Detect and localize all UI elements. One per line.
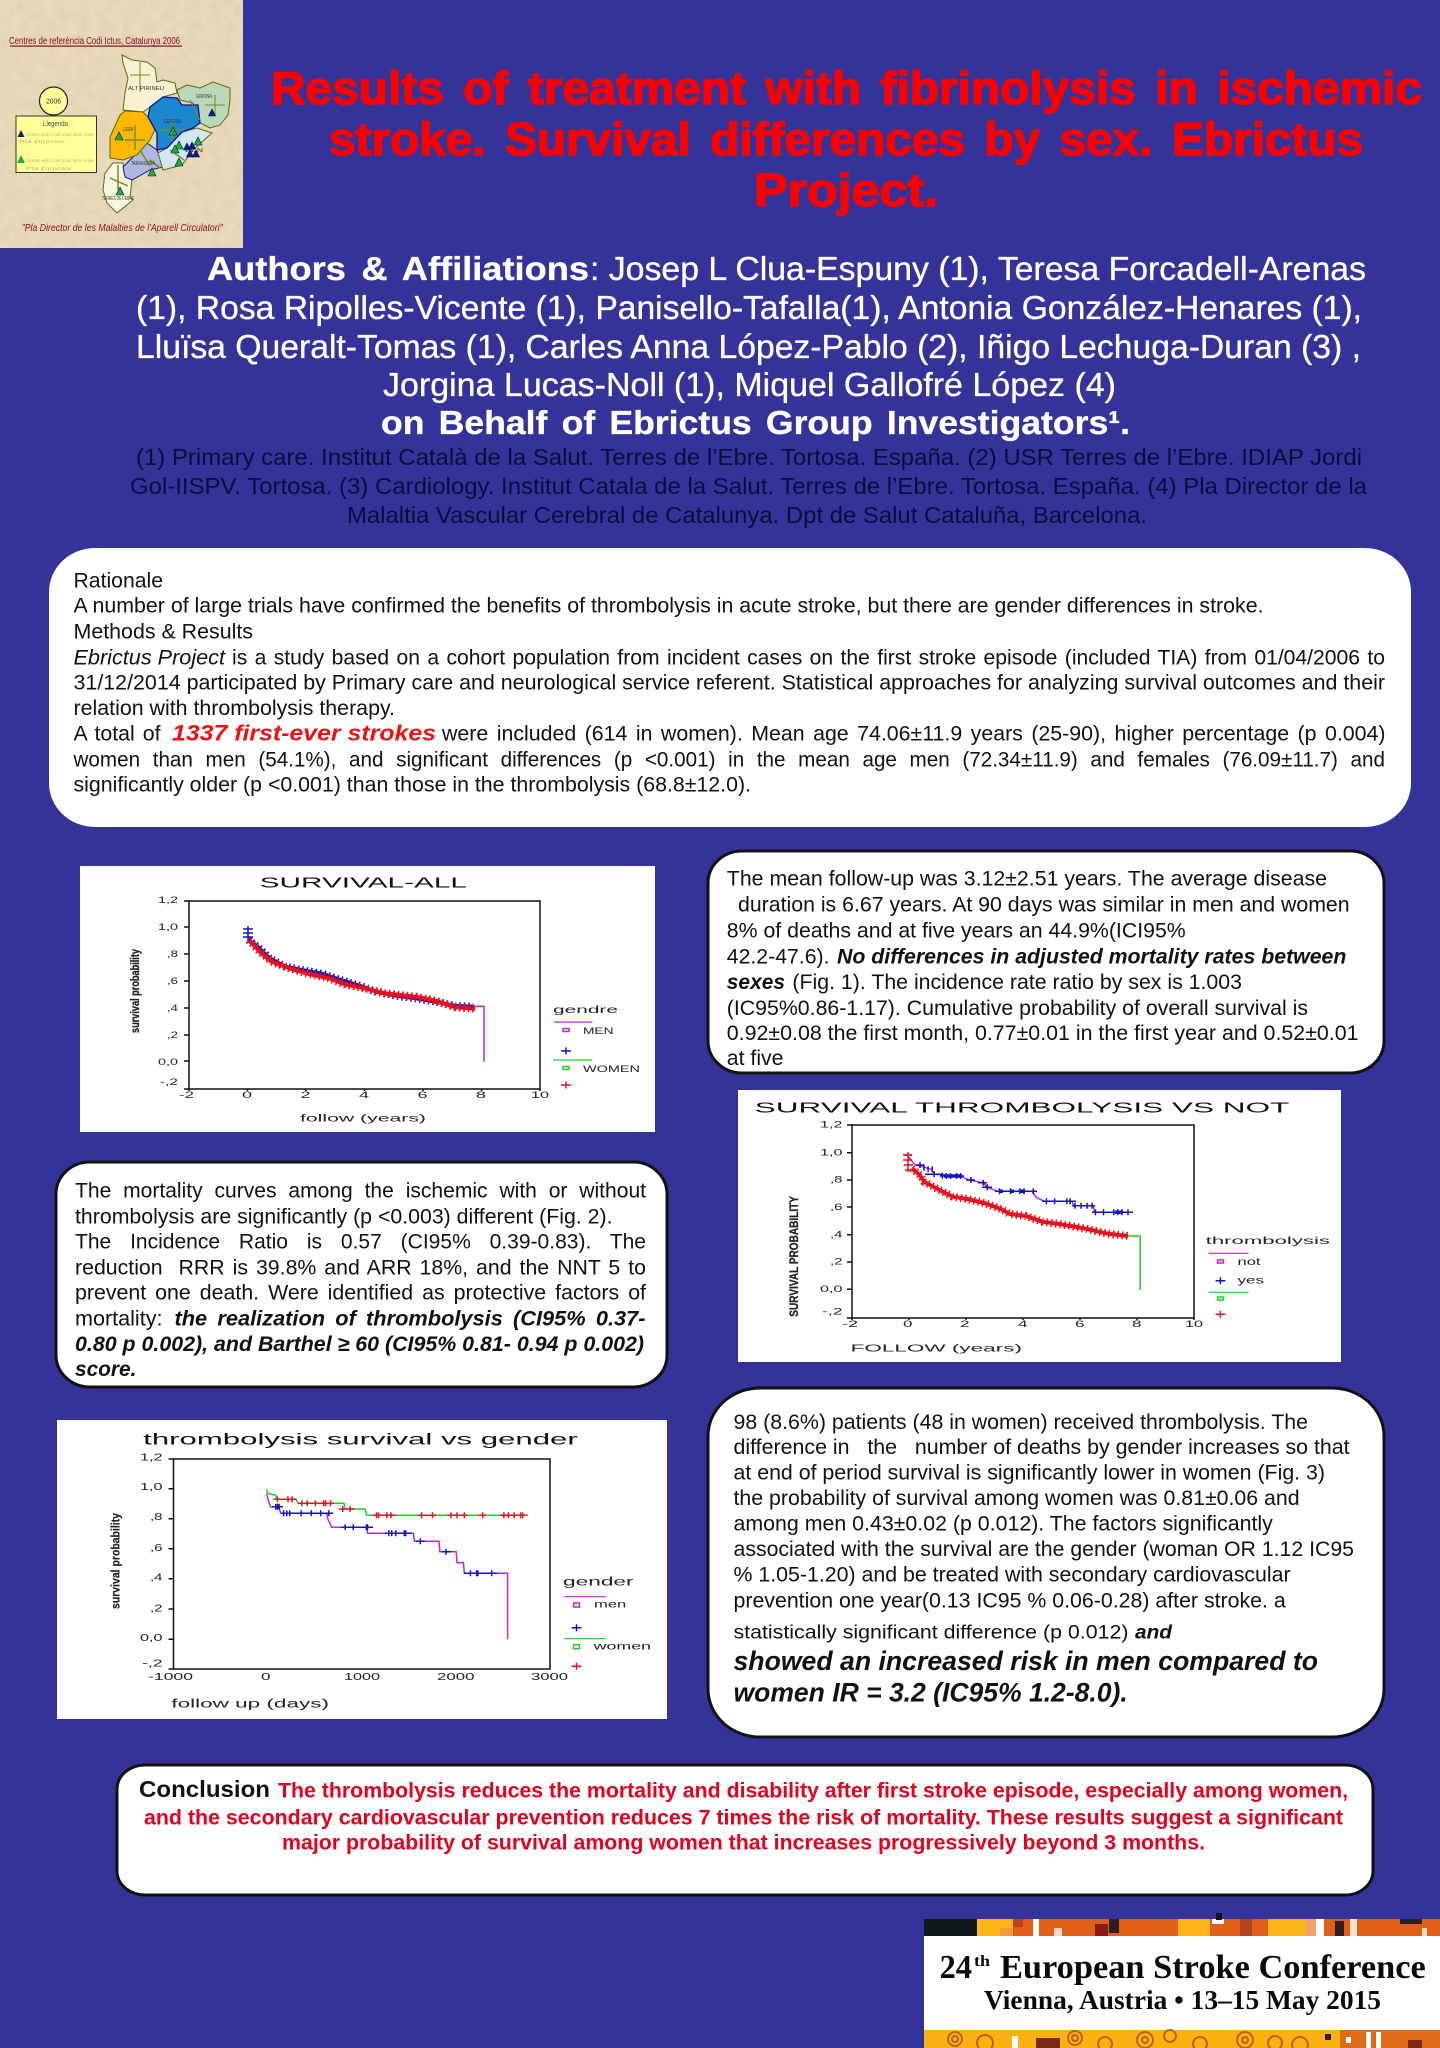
patients text lines: at end of period survival is significantly lower in women (Fig. 3) xyxy=(734,1461,1325,1484)
axis tick labels: 1,2 xyxy=(820,1120,842,1131)
follow-up text lines: at five xyxy=(727,1047,784,1070)
panel: chart survival thrombolysis vs not xyxy=(738,1090,1341,1362)
axis tick labels: 0 xyxy=(261,1672,271,1683)
authors and affiliations: : Josep L Clua-Espuny (1), Teresa Forcadell-Arenas xyxy=(590,250,1366,287)
y axis label: survival probability xyxy=(128,949,142,1033)
mortality text lines: reduction RRR is 39.8% and ARR 18%, and the NNT 5 to xyxy=(75,1256,646,1279)
rationale text: A number of large trials have confirmed the benefits of thrombolysis in acute stroke, but there are gender differences in stroke. xyxy=(74,595,1264,618)
title: Results of treatment with fibrinolysis in ischemic xyxy=(271,62,1422,114)
rationale text: Rationale xyxy=(74,569,163,592)
map region labels: ALT PIRINEU xyxy=(128,86,164,92)
axis tick labels: ,2 xyxy=(167,1030,178,1041)
mortality text lines: prevent one death. Were identified as protective factors of xyxy=(75,1281,646,1304)
axis tick labels: ,8 xyxy=(830,1174,842,1185)
mortality text lines: The Incidence Ratio is 0.57 (CI95% 0.39-0.83). The xyxy=(75,1230,646,1253)
axis tick labels: ,2 xyxy=(150,1603,163,1614)
chart legend: gendre xyxy=(553,1004,618,1016)
x axis label: follow up (days) xyxy=(171,1699,329,1711)
axis tick labels: 6 xyxy=(418,1090,428,1101)
authors and affiliations: Authors & Affiliations xyxy=(207,250,589,287)
follow-up text lines: The mean follow-up was 3.12±2.51 years. The average disease xyxy=(727,868,1327,891)
rationale text: A total of xyxy=(74,722,161,745)
map region labels: BCN xyxy=(185,148,204,154)
conclusion heading: Conclusion xyxy=(139,1776,270,1802)
rationale text: Ebrictus Project xyxy=(74,646,226,669)
conference location and date: Vienna, Austria • 13–15 May 2015 xyxy=(984,1985,1381,2015)
y axis label: survival probability xyxy=(109,1513,123,1609)
map regions xyxy=(103,55,230,213)
axis tick labels: 8 xyxy=(1132,1319,1142,1330)
decorative bottom band xyxy=(924,2030,1440,2048)
chart legend xyxy=(563,1577,651,1670)
axis tick labels: 1,0 xyxy=(820,1147,842,1158)
follow-up text lines: sexes xyxy=(727,971,785,994)
chart legend: thrombolysis xyxy=(1206,1235,1330,1247)
affiliation details: (1) Primary care. Institut Català de la Salut. Terres de l’Ebre. Tortosa. España. (2) USR Terres de l’Ebre. IDIAP Jordi xyxy=(136,444,1362,470)
map legend: Pla Director xyxy=(19,139,66,144)
axis tick labels: ,8 xyxy=(167,949,178,960)
axis tick labels: 8 xyxy=(476,1090,486,1101)
mortality text lines: mortality: xyxy=(75,1308,162,1331)
patients text lines: statistically significant difference (p 0.012) xyxy=(734,1621,1128,1643)
follow-up text lines: 8% of deaths and at five years an 44.9%(ICI95% xyxy=(727,920,1186,943)
axis tick labels: 4 xyxy=(359,1090,369,1101)
axis tick labels: 1,0 xyxy=(158,922,178,933)
chart legend: yes xyxy=(1238,1276,1264,1286)
axis tick labels: 2000 xyxy=(437,1672,475,1683)
axis tick labels: -2 xyxy=(179,1090,194,1101)
survival curves xyxy=(903,1152,1140,1290)
rationale text: relation with thrombolysis therapy. xyxy=(74,697,395,720)
conclusion text: major probability of survival among women that increases progressively beyond 3 months. xyxy=(282,1831,1205,1854)
chart legend xyxy=(1206,1235,1330,1318)
patients text lines: % 1.05-1.20) and be treated with secondary cardiovascular xyxy=(734,1564,1291,1587)
rationale text: Methods & Results xyxy=(74,620,253,643)
map year circle: 2006 xyxy=(46,98,61,106)
axis tick labels: ,4 xyxy=(167,1003,178,1014)
patients text lines: prevention one year(0.13 IC95 % 0.06-0.28) after stroke. a xyxy=(734,1590,1286,1613)
axis tick labels: 0,0 xyxy=(140,1633,163,1644)
chart legend: WOMEN xyxy=(583,1064,640,1074)
patients text lines: difference in the number of deaths by gender increases so that xyxy=(734,1436,1350,1459)
affiliation details: Malaltia Vascular Cerebral de Catalunya. Dpt de Salut Cataluña, Barcelona. xyxy=(347,502,1147,528)
authors and affiliations: Jorgina Lucas-Noll (1), Miquel Gallofré López (4) xyxy=(383,366,1116,403)
conference name: th xyxy=(974,1953,990,1970)
axis tick labels: 0 xyxy=(242,1090,252,1101)
chart legend: MEN xyxy=(583,1026,614,1036)
axis tick labels: 10 xyxy=(531,1090,549,1101)
title: Project. xyxy=(754,164,938,216)
panel: chart thrombolysis survival vs gender xyxy=(57,1420,667,1719)
follow-up text lines: 0.92±0.08 the first month, 0.77±0.01 in the first year and 0.52±0.01 xyxy=(727,1022,1358,1045)
survival curves xyxy=(266,1489,528,1639)
authors and affiliations xyxy=(136,250,1366,441)
axis tick labels xyxy=(158,895,549,1101)
follow-up text lines xyxy=(727,868,1358,1070)
map legend xyxy=(16,116,96,172)
chart title: SURVIVAL-ALL xyxy=(260,876,467,892)
axis tick labels: ,6 xyxy=(150,1543,163,1554)
panel: chart survival all xyxy=(80,866,655,1132)
map plan caption: "Pla Director de les Malalties de l'Aparell Circulatori" xyxy=(22,222,224,234)
axis tick labels: 1,2 xyxy=(158,895,178,906)
rationale text: were included (614 in women). Mean age 74.06±11.9 years (25-90), higher percentage (p 0.004) xyxy=(441,722,1385,745)
map triangle markers xyxy=(115,109,216,195)
patients text lines: showed an increased risk in men compared to xyxy=(734,1646,1318,1676)
axis tick labels xyxy=(820,1120,1203,1330)
follow-up text lines: (IC95%0.86-1.17). Cumulative probability of overall survival is xyxy=(727,997,1308,1020)
chart title: SURVIVAL THROMBOLYSIS VS NOT xyxy=(755,1101,1290,1117)
chart legend: not xyxy=(1238,1257,1261,1268)
axis tick labels: ,4 xyxy=(150,1573,163,1584)
mortality text lines xyxy=(75,1179,646,1381)
axis tick labels: 0,0 xyxy=(820,1284,842,1295)
axis tick labels: 2 xyxy=(300,1090,310,1101)
map region labels: GIRONA xyxy=(196,94,213,100)
axis tick labels: 10 xyxy=(1185,1319,1203,1330)
plot frame and axes xyxy=(184,901,540,1091)
authors and affiliations: (1), Rosa Ripolles-Vicente (1), Panisello-Tafalla(1), Antonia González-Henares (1), xyxy=(136,289,1362,326)
follow-up text lines: No differences in adjusted mortality rates between xyxy=(837,945,1346,968)
patients text lines: the probability of survival among women was 0.81±0.06 and xyxy=(734,1487,1300,1510)
axis tick labels: 2 xyxy=(960,1319,970,1330)
conclusion text xyxy=(144,1780,1348,1854)
axis tick labels: 1,2 xyxy=(140,1453,163,1464)
conclusion text: and the secondary cardiovascular prevention reduces 7 times the risk of mortality. These results suggest a significant xyxy=(144,1806,1343,1829)
axis tick labels: ,8 xyxy=(150,1512,163,1523)
mortality text lines: score. xyxy=(75,1358,136,1381)
plot frame and axes xyxy=(847,1125,1194,1320)
axis tick labels: -,2 xyxy=(160,1077,178,1088)
survival curves xyxy=(243,926,484,1062)
mortality text lines: The mortality curves among the ischemic with or without xyxy=(75,1179,646,1202)
panel: thrombolysis patients text xyxy=(708,1388,1384,1737)
rationale text: 1337 first-ever strokes xyxy=(172,720,436,745)
axis tick labels: ,6 xyxy=(830,1202,842,1213)
conference name: European Stroke Conference xyxy=(1000,1949,1426,1986)
map legend: Centre amb Codi Ictus intra i inter xyxy=(26,132,95,137)
axis tick labels: 0,0 xyxy=(158,1057,178,1068)
patients text lines: 98 (8.6%) patients (48 in women) received thrombolysis. The xyxy=(734,1411,1308,1434)
conclusion text: The thrombolysis reduces the mortality and disability after first stroke episode, especially among women, xyxy=(278,1780,1348,1803)
axis tick labels: -2 xyxy=(842,1319,858,1330)
authors and affiliations: Lluïsa Queralt-Tomas (1), Carles Anna López-Pablo (2), Iñigo Lechuga-Duran (3) , xyxy=(136,328,1361,365)
axis tick labels: -,2 xyxy=(822,1306,842,1317)
chart legend: men xyxy=(594,1598,627,1610)
affiliation details: Gol-IISPV. Tortosa. (3) Cardiology. Institut Catala de la Salut. Terres de l’Ebre. Tortosa. España. (4) Pla Director de la xyxy=(130,473,1368,499)
mortality text lines: thrombolysis are significantly (p <0.003) different (Fig. 2). xyxy=(75,1205,612,1228)
map title: Centres de referència Codi Ictus, Catalunya 2006 xyxy=(9,36,180,47)
chart legend xyxy=(553,1004,640,1088)
panel: conclusion xyxy=(117,1765,1373,1895)
follow-up text lines: (Fig. 1). The incidence rate ratio by sex is 1.003 xyxy=(792,971,1242,994)
chart legend: women xyxy=(592,1640,651,1652)
title: stroke. Survival differences by sex. Ebrictus xyxy=(329,113,1363,165)
patients text lines: among men 0.43±0.02 (p 0.012). The factors significantly xyxy=(734,1513,1273,1536)
affiliation details xyxy=(130,444,1368,528)
plot frame and axes xyxy=(168,1459,550,1669)
map legend: Centre amb Codi Ictus intra i inter xyxy=(26,158,95,163)
axis tick labels: 4 xyxy=(1018,1319,1028,1330)
authors and affiliations: on Behalf of Ebrictus Group Investigators¹. xyxy=(381,404,1130,441)
rationale text xyxy=(73,569,1386,797)
y axis label: SURVIVAL PROBABILITY xyxy=(787,1196,801,1317)
mortality text lines: the realization of thrombolysis (CI95% 0.37- xyxy=(174,1308,646,1331)
panel: Catalunya reference centres map xyxy=(0,0,243,248)
chart title: thrombolysis survival vs gender xyxy=(143,1432,579,1449)
map year circle xyxy=(40,87,68,115)
x axis label: follow (years) xyxy=(300,1113,426,1125)
panel: mortality curves text xyxy=(56,1162,667,1387)
axis tick labels: 3000 xyxy=(531,1672,569,1683)
axis tick labels: ,6 xyxy=(167,976,178,987)
chart legend: gender xyxy=(563,1577,634,1589)
map legend: Pla Director xyxy=(26,166,73,171)
axis tick labels xyxy=(140,1453,569,1683)
rationale text: is a study based on a cohort population from incident cases on the first stroke episode (included TIA) from 01/04/2006 to xyxy=(232,646,1385,669)
map region labels: TARRAGONA xyxy=(131,161,155,167)
axis tick labels: ,4 xyxy=(830,1229,842,1240)
axis tick labels: 1000 xyxy=(344,1672,381,1683)
map region labels: TERRES DE L'EBRE xyxy=(102,196,134,202)
map region labels xyxy=(102,86,213,202)
mortality text lines: 0.80 p 0.002), and Barthel ≥ 60 (CI95% 0.81- 0.94 p 0.002) xyxy=(75,1333,644,1356)
panel: rationale and methods xyxy=(49,548,1411,827)
title xyxy=(271,62,1422,216)
conference name: 24 xyxy=(940,1949,972,1986)
rationale text: 31/12/2014 participated by Primary care and neurological service referent. Statistical approaches for analyzing survival outcomes and their xyxy=(74,671,1385,694)
axis tick labels: 6 xyxy=(1075,1319,1084,1330)
axis tick labels: -,2 xyxy=(142,1659,163,1670)
patients text lines xyxy=(734,1411,1354,1708)
patients text lines: women IR = 3.2 (IC95% 1.2-8.0). xyxy=(734,1678,1128,1708)
axis tick labels: -1000 xyxy=(148,1672,194,1683)
map region labels: CENTRAL xyxy=(164,119,182,125)
map legend: Llegenda xyxy=(43,119,69,128)
follow-up text lines: 42.2-47.6). xyxy=(727,945,830,968)
patients text lines: and xyxy=(1135,1621,1173,1643)
follow-up text lines: duration is 6.67 years. At 90 days was similar in men and women xyxy=(738,894,1350,917)
axis tick labels: 0 xyxy=(903,1319,912,1330)
map region labels: LLEIDA xyxy=(123,127,133,133)
rationale text: significantly older (p <0.001) than those in the thrombolysis (68.8±12.0). xyxy=(74,774,751,797)
conference logo banner xyxy=(924,1913,1440,2048)
axis tick labels: ,2 xyxy=(830,1256,842,1267)
patients text lines: associated with the survival are the gender (woman OR 1.12 IC95 xyxy=(734,1538,1354,1561)
axis tick labels: 1,0 xyxy=(140,1482,163,1493)
rationale text: women than men (54.1%), and significant differences (p <0.001) in the mean age men (72.34±11.9) and females (76.09±11.7) and xyxy=(73,749,1385,772)
x axis label: FOLLOW (years) xyxy=(851,1343,1022,1355)
panel: follow-up results text xyxy=(708,851,1384,1073)
decorative top band xyxy=(924,1913,1440,1936)
